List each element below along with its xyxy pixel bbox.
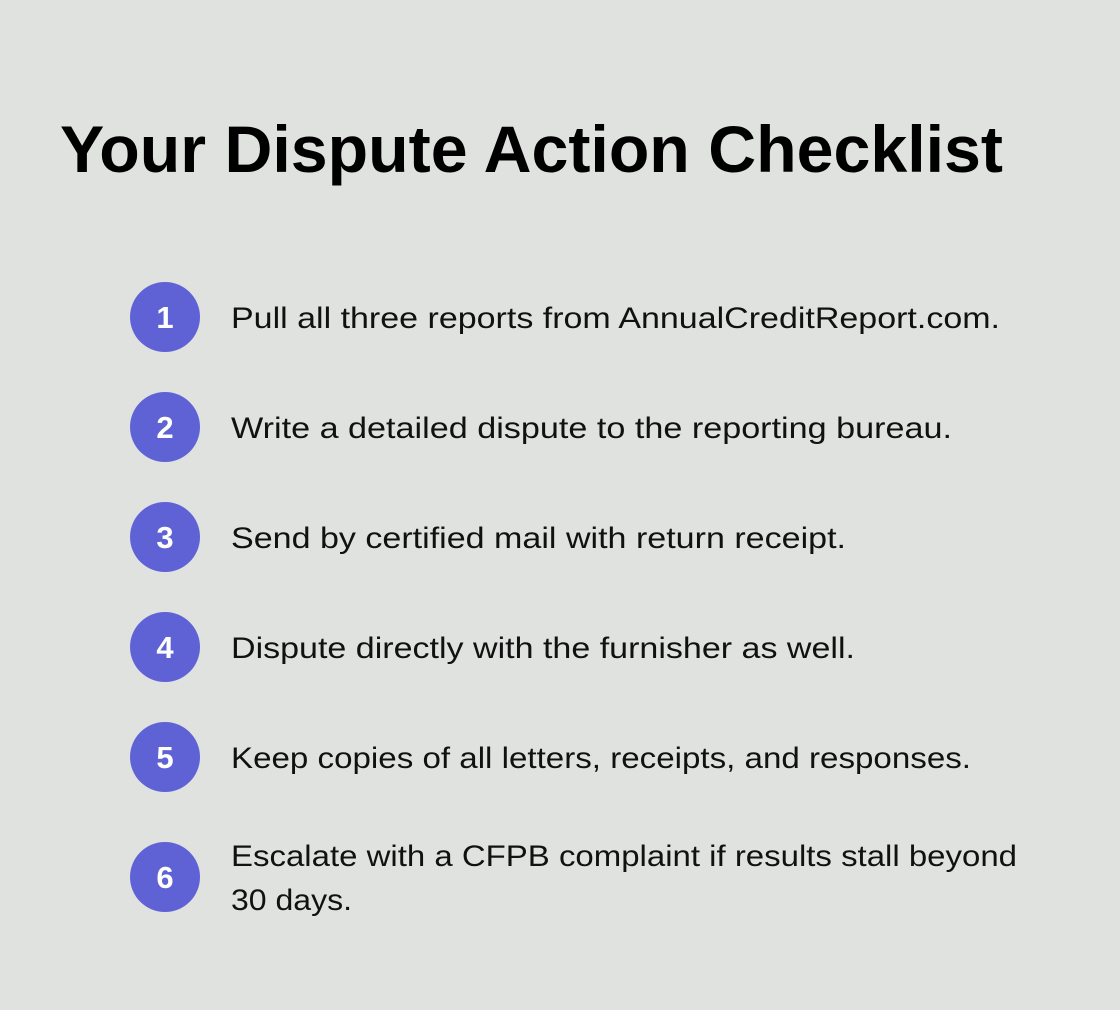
item 3 — [130, 502, 846, 572]
item 5: 5 — [156, 740, 174, 775]
item 3: 3 — [156, 520, 174, 555]
item 1: Pull all three reports from AnnualCreditReport.com. — [231, 302, 1000, 335]
item 4 — [130, 612, 855, 682]
checklist — [130, 282, 1017, 917]
item 5: Keep copies of all letters, receipts, and responses. — [231, 742, 971, 775]
item 6: Escalate with a CFPB complaint if results stall beyond — [231, 840, 1017, 873]
item 4: 4 — [156, 630, 174, 665]
item 4: Dispute directly with the furnisher as well. — [231, 632, 855, 665]
item 1: 1 — [156, 300, 174, 335]
item 2: Write a detailed dispute to the reporting bureau. — [231, 412, 952, 445]
title: Your Dispute Action Checklist — [60, 112, 1003, 186]
item 6: 6 — [156, 860, 174, 895]
item 2 — [130, 392, 952, 462]
item 6 — [130, 840, 1017, 917]
item 5 — [130, 722, 971, 792]
item 2: 2 — [156, 410, 174, 445]
item 6: 30 days. — [231, 884, 352, 917]
item 1 — [130, 282, 1000, 352]
item 3: Send by certified mail with return receipt. — [231, 522, 846, 555]
